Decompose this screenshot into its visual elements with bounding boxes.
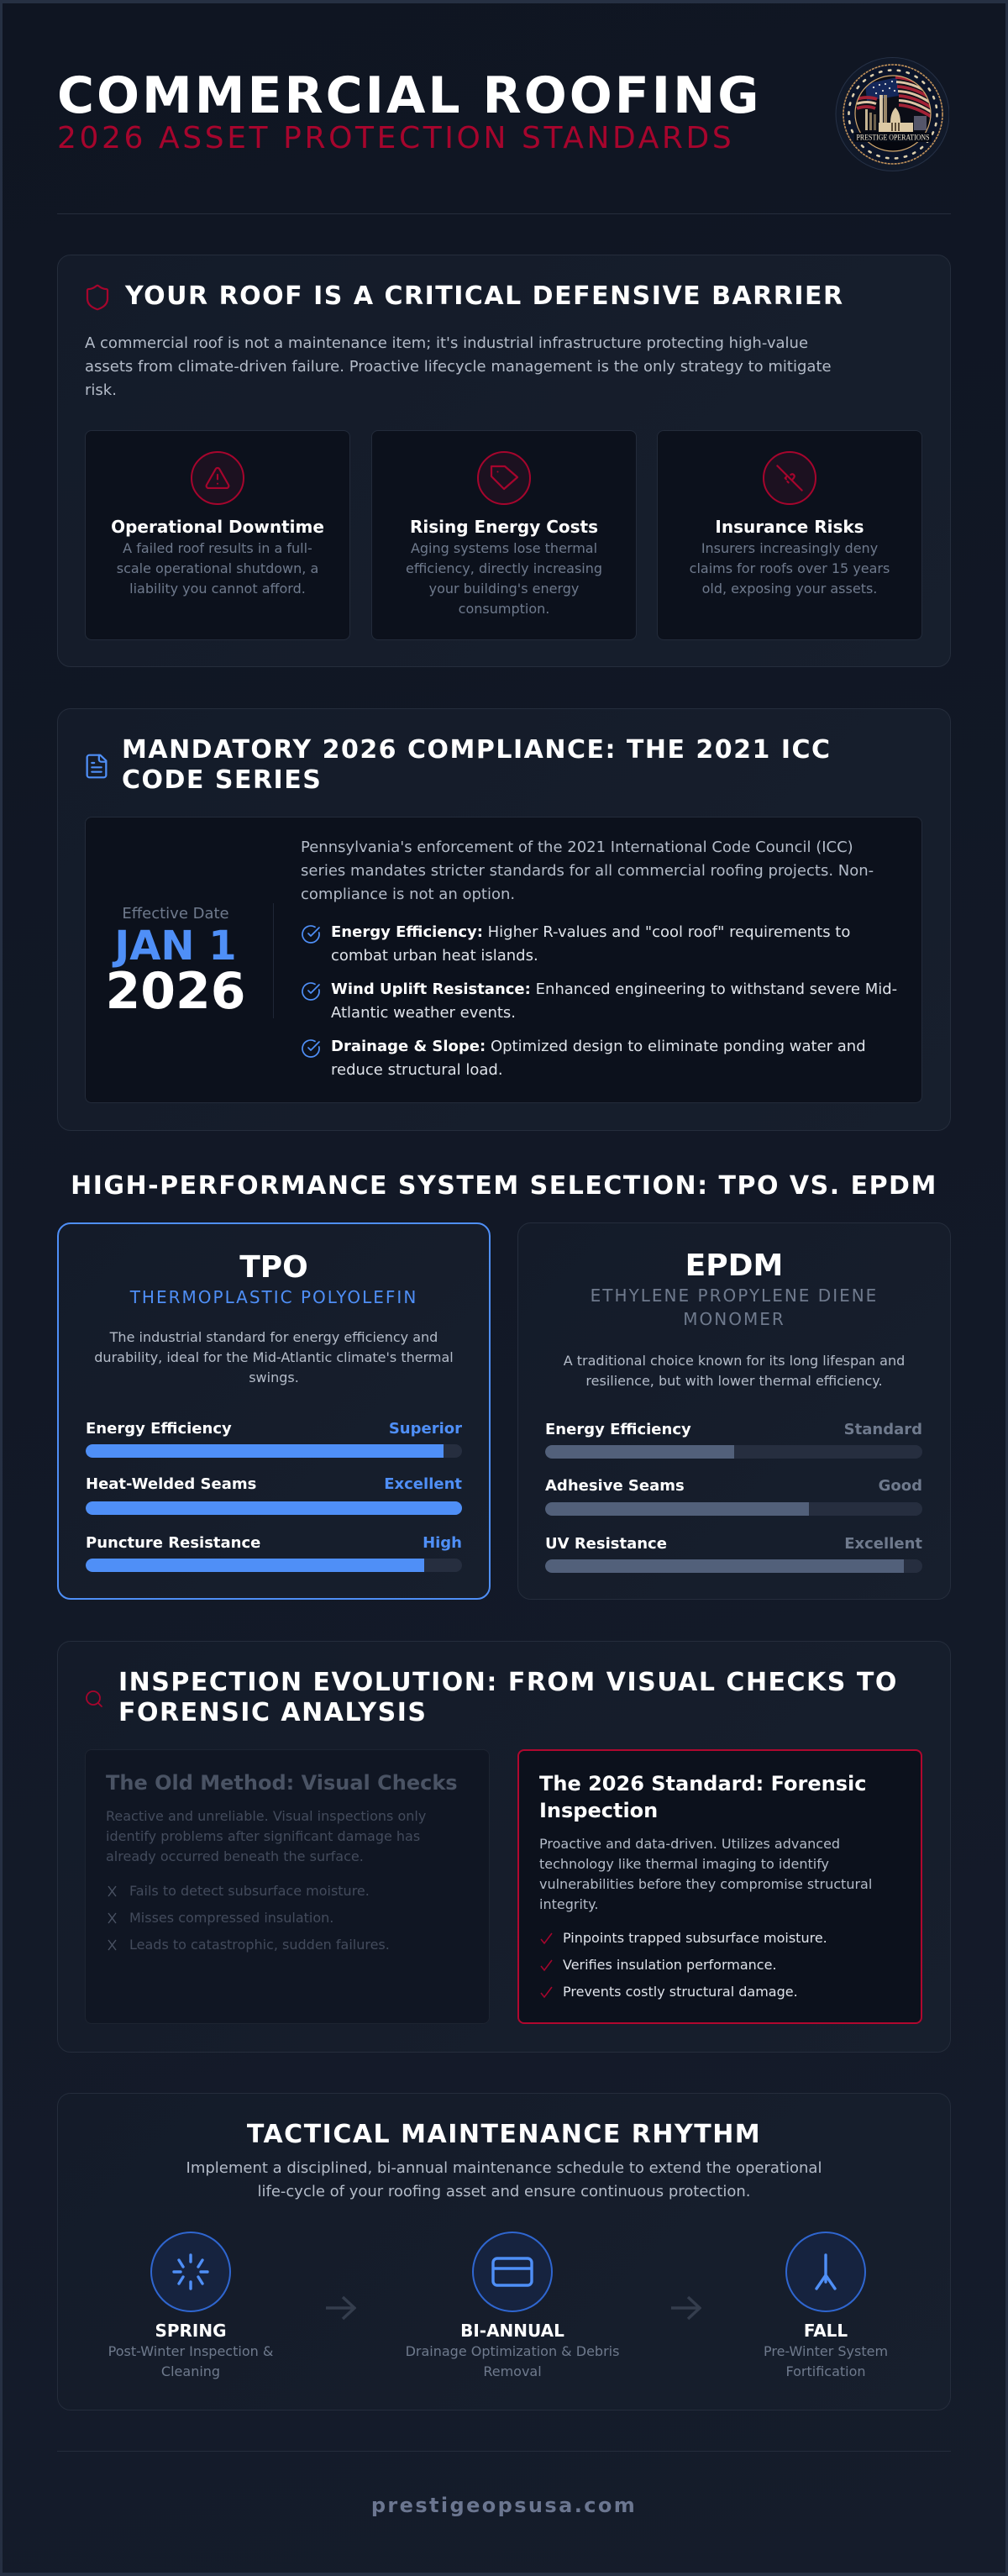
intro text: risk. — [85, 381, 117, 399]
subtitle: 2026 ASSET PROTECTION STANDARDS — [57, 121, 734, 155]
bi-annual step: Drainage Optimization & Debris — [406, 2343, 619, 2359]
maintenance intro: life-cycle of your roofing asset and ensure continuous protection. — [257, 2183, 751, 2200]
text: Adhesive Seams — [545, 1477, 685, 1495]
text: High — [423, 1534, 462, 1552]
bi-annual step: Removal — [483, 2363, 542, 2379]
compliance paragraph: series mandates stricter standards for all commercial roofing projects. Non- — [301, 862, 874, 880]
icon: check — [302, 1039, 320, 1058]
text: Prevents costly structural damage. — [563, 1984, 798, 2000]
heading: compliance: MANDATORY 2026 COMPLIANCE: THE 2021 ICC — [122, 735, 832, 765]
date: Jan 1: JAN 1 — [114, 923, 237, 970]
icon: shield — [86, 284, 109, 311]
EPDM title: EPDM — [685, 1249, 783, 1283]
arrow — [326, 2296, 356, 2320]
footer website: prestigeopsusa.com — [371, 2494, 637, 2517]
TPO description: durability, ideal for the Mid-Atlantic climate's thermal — [94, 1349, 454, 1365]
heading: critical barrier: YOUR ROOF IS A CRITICAL DEFENSIVE BARRIER — [125, 281, 844, 311]
text: Pinpoints trapped subsurface moisture. — [563, 1930, 827, 1946]
heading: inspection: FORENSIC ANALYSIS — [118, 1698, 428, 1727]
icon: check — [302, 925, 320, 944]
requirement: energy — [331, 923, 850, 965]
heading: maintenance: TACTICAL MAINTENANCE RHYTHM — [247, 2120, 761, 2149]
heading: compliance: CODE SERIES — [122, 765, 322, 795]
text: Leads to catastrophic, sudden failures. — [129, 1937, 390, 1953]
fall step: Pre-Winter System — [764, 2343, 888, 2359]
heading: inspection — [118, 1668, 898, 1727]
requirement: energy: combat urban heat islands. — [331, 947, 538, 965]
panel: inspection — [57, 1641, 951, 2053]
requirement: drainage: reduce structural load. — [331, 1061, 503, 1079]
EPDM description: A traditional choice known for its long lifespan and — [564, 1353, 905, 1369]
risk card: energy: Aging systems lose thermal efficiency, directly increasing your building's energy consumption. — [406, 540, 602, 617]
TPO subtitle: THERMOPLASTIC POLYOLEFIN — [130, 1287, 417, 1307]
EPDM metrics: Energy Efficiency — [545, 1421, 691, 1438]
risk card: insurance: Insurers increasingly deny claims for roofs over 15 years old, exposing your assets. — [690, 540, 890, 597]
old method description: already occurred beneath the surface. — [106, 1848, 364, 1864]
old method description: Reactive and unreliable. Visual inspections only — [106, 1808, 426, 1824]
compliance paragraph — [301, 839, 874, 903]
requirement: wind: Wind Uplift Resistance: Enhanced engineering to withstand severe Mid- — [331, 980, 897, 998]
fall step: FALL — [804, 2321, 848, 2341]
text: Misses compressed insulation. — [129, 1910, 333, 1926]
new standard title — [539, 1772, 866, 1822]
panel: compliance — [57, 708, 951, 1131]
requirement: drainage — [331, 1038, 866, 1079]
new standard description: vulnerabilities before they compromise structural — [539, 1876, 872, 1892]
text: UV Resistance — [545, 1535, 667, 1553]
icon: shield off — [763, 451, 816, 505]
icon: fall — [785, 2232, 866, 2312]
risk card: energy — [371, 430, 637, 640]
risk card: energy: Rising Energy Costs — [410, 517, 598, 537]
icon: spring — [150, 2232, 231, 2312]
icon: document — [86, 754, 108, 778]
bi-annual step: BI-ANNUAL — [460, 2321, 564, 2341]
panel: EPDM — [517, 1222, 951, 1600]
TPO description: swings. — [249, 1369, 299, 1385]
heading: compliance — [122, 735, 832, 795]
text: Heat-Welded Seams — [86, 1475, 256, 1493]
requirement: wind — [331, 980, 897, 1022]
maintenance intro — [186, 2159, 822, 2200]
text: Standard — [844, 1421, 922, 1438]
fall step: Fortification — [785, 2363, 866, 2379]
new standard description — [539, 1836, 872, 1912]
compliance box — [85, 817, 922, 1103]
panel: critical defensive barrier — [57, 255, 951, 667]
TPO description — [94, 1329, 454, 1385]
compliance paragraph: Pennsylvania's enforcement of the 2021 International Code Council (ICC) — [301, 839, 853, 856]
risk card: downtime: A failed roof results in a full-scale operational shutdown, a liability you cannot afford. — [117, 540, 318, 597]
icon: warning — [191, 451, 244, 505]
icon: magnifier — [86, 1690, 102, 1707]
EPDM subtitle — [591, 1285, 878, 1329]
requirement: energy: Energy Efficiency: Higher R-values and "cool roof" requirements to — [331, 923, 850, 941]
intro text — [85, 334, 832, 399]
new standard description: Proactive and data-driven. Utilizes advanced — [539, 1836, 840, 1852]
bi-annual step — [406, 2321, 619, 2379]
text: Fails to detect subsurface moisture. — [129, 1883, 370, 1899]
heading: inspection: INSPECTION EVOLUTION: FROM VISUAL CHECKS TO — [118, 1668, 898, 1697]
effective date label: Effective Date — [122, 905, 229, 923]
old method description: identify problems after significant damage has — [106, 1828, 420, 1844]
TPO description: The industrial standard for energy efficiency and — [110, 1329, 438, 1345]
new standard description: technology like thermal imaging to identify — [539, 1856, 829, 1872]
spring step: SPRING — [155, 2321, 227, 2341]
new standard benefits — [541, 1930, 827, 1946]
compliance paragraph: compliance is not an option. — [301, 886, 515, 903]
panel: maintenance — [57, 2093, 951, 2410]
text: Good — [879, 1477, 922, 1495]
date: 2026: 2026 — [106, 962, 245, 1021]
risk card: downtime: Operational Downtime — [111, 517, 324, 537]
heading: system selection: HIGH-PERFORMANCE SYSTEM SELECTION: TPO VS. EPDM — [71, 1171, 937, 1201]
text: Excellent — [844, 1535, 922, 1553]
arrow — [671, 2296, 701, 2320]
card: 2026 standard — [517, 1749, 922, 2024]
EPDM subtitle: ETHYLENE PROPYLENE DIENE — [591, 1285, 878, 1306]
fall step — [764, 2321, 888, 2379]
title: COMMERCIAL ROOFING — [57, 66, 762, 125]
card: old method — [85, 1749, 490, 2024]
spring step — [108, 2321, 273, 2379]
EPDM description: resilience, but with lower thermal efficiency. — [585, 1373, 883, 1389]
risk card: insurance — [657, 430, 922, 640]
spring step: Cleaning — [161, 2363, 220, 2379]
TPO metrics: Energy Efficiency — [86, 1420, 232, 1438]
logo badge: PRESTIGE OPERATIONS — [857, 134, 929, 143]
new standard title: The 2026 Standard: Forensic — [539, 1772, 866, 1795]
intro text: assets from climate-driven failure. Proactive lifecycle management is the only strategy to mitigate — [85, 358, 832, 376]
text: Superior — [389, 1420, 462, 1438]
EPDM subtitle: MONOMER — [683, 1309, 785, 1329]
new standard description: integrity. — [539, 1896, 598, 1912]
old method title: The Old Method: Visual Checks — [106, 1771, 458, 1795]
risk card: insurance: Insurance Risks — [715, 517, 864, 537]
old method description — [106, 1808, 426, 1864]
spring step: Post-Winter Inspection & — [108, 2343, 273, 2359]
risk card: downtime — [85, 430, 350, 640]
maintenance intro: Implement a disciplined, bi-annual maintenance schedule to extend the operational — [186, 2159, 822, 2177]
text: Puncture Resistance — [86, 1534, 260, 1552]
TPO title: TPO — [239, 1250, 308, 1285]
intro text: A commercial roof is not a maintenance item; it's industrial infrastructure protecting high-value — [85, 334, 808, 352]
requirement: drainage: Drainage & Slope: Optimized design to eliminate ponding water and — [331, 1038, 866, 1055]
EPDM description — [563, 1353, 905, 1389]
requirement: wind: Atlantic weather events. — [331, 1004, 516, 1022]
icon: tag — [477, 451, 531, 505]
panel: TPO — [57, 1222, 491, 1600]
logo badge — [835, 57, 949, 171]
icon: bi-annual — [472, 2232, 553, 2312]
icon: check — [302, 982, 320, 1001]
text: Excellent — [384, 1475, 462, 1493]
old method failures — [108, 1883, 370, 1899]
text: Verifies insulation performance. — [563, 1957, 777, 1973]
new standard title: Inspection — [539, 1799, 658, 1822]
